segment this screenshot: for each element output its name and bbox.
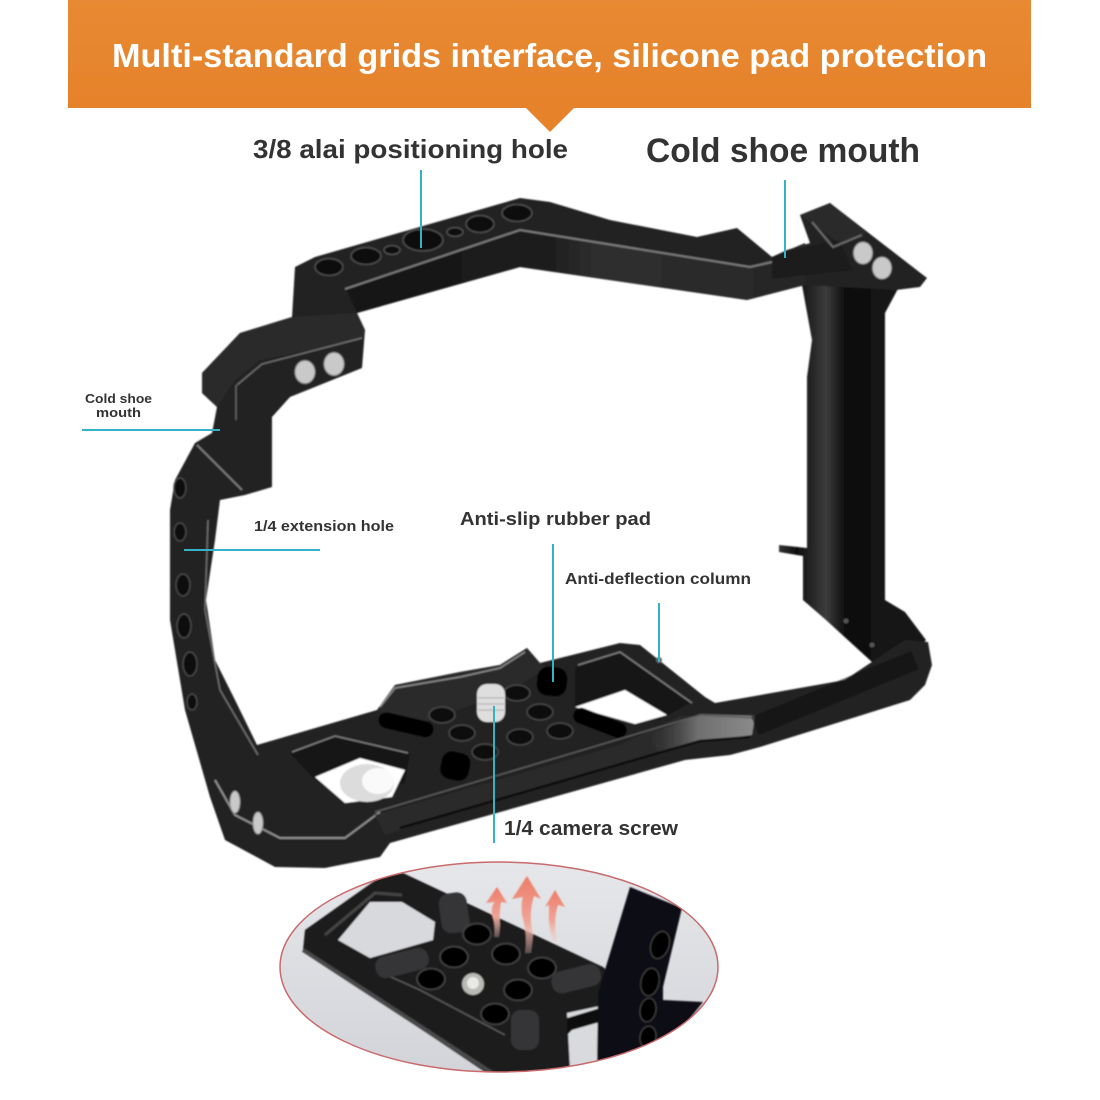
base plate top details	[290, 648, 915, 835]
inset screw	[462, 973, 484, 995]
inset lower window	[567, 1006, 600, 1070]
inset photo: underside of base plate with silicone pads	[280, 862, 718, 1080]
top bar and frame	[170, 198, 932, 868]
threaded holes	[429, 685, 573, 760]
callout: cold shoe mouth left: Cold shoe	[85, 391, 152, 406]
camera cage product drawing	[170, 198, 932, 868]
top plate holes	[315, 204, 532, 276]
inset silicone pads	[373, 891, 603, 1050]
front rail highlight	[375, 714, 755, 835]
black slots	[377, 711, 435, 739]
right window	[575, 653, 690, 720]
callout: anti-slip rubber pad: Anti-slip rubber pad	[460, 509, 651, 529]
left arm holes	[174, 478, 197, 710]
curved rubber wing	[377, 648, 548, 728]
callout: anti-deflection column: Anti-deflection column	[565, 571, 751, 588]
top bar front face	[345, 230, 805, 313]
camera screw	[477, 684, 505, 722]
left window	[290, 737, 410, 803]
inset plate	[302, 873, 606, 1072]
header banner	[68, 0, 1031, 132]
rear column	[779, 285, 926, 690]
inset heat arrows	[486, 876, 565, 953]
inset arm	[597, 887, 703, 1062]
callout: cold shoe mouth top: Cold shoe mouth	[646, 132, 920, 170]
left arm rim	[205, 520, 258, 755]
cage bolts	[230, 242, 892, 834]
title: Multi-standard grids interface, silicone pad protection	[112, 37, 987, 74]
upper left shoulder	[202, 313, 365, 407]
callout: 1/4 extension hole: 1/4 extension hole	[254, 518, 394, 535]
callout: 3/8 alai positioning hole: 3/8 alai positioning hole	[253, 134, 568, 164]
callout: cold shoe mouth left: mouth	[96, 405, 141, 420]
callout: cold shoe mouth left	[82, 391, 220, 430]
inset threaded holes	[417, 924, 556, 1024]
callout: 1/4 camera screw: 1/4 camera screw	[504, 818, 678, 840]
